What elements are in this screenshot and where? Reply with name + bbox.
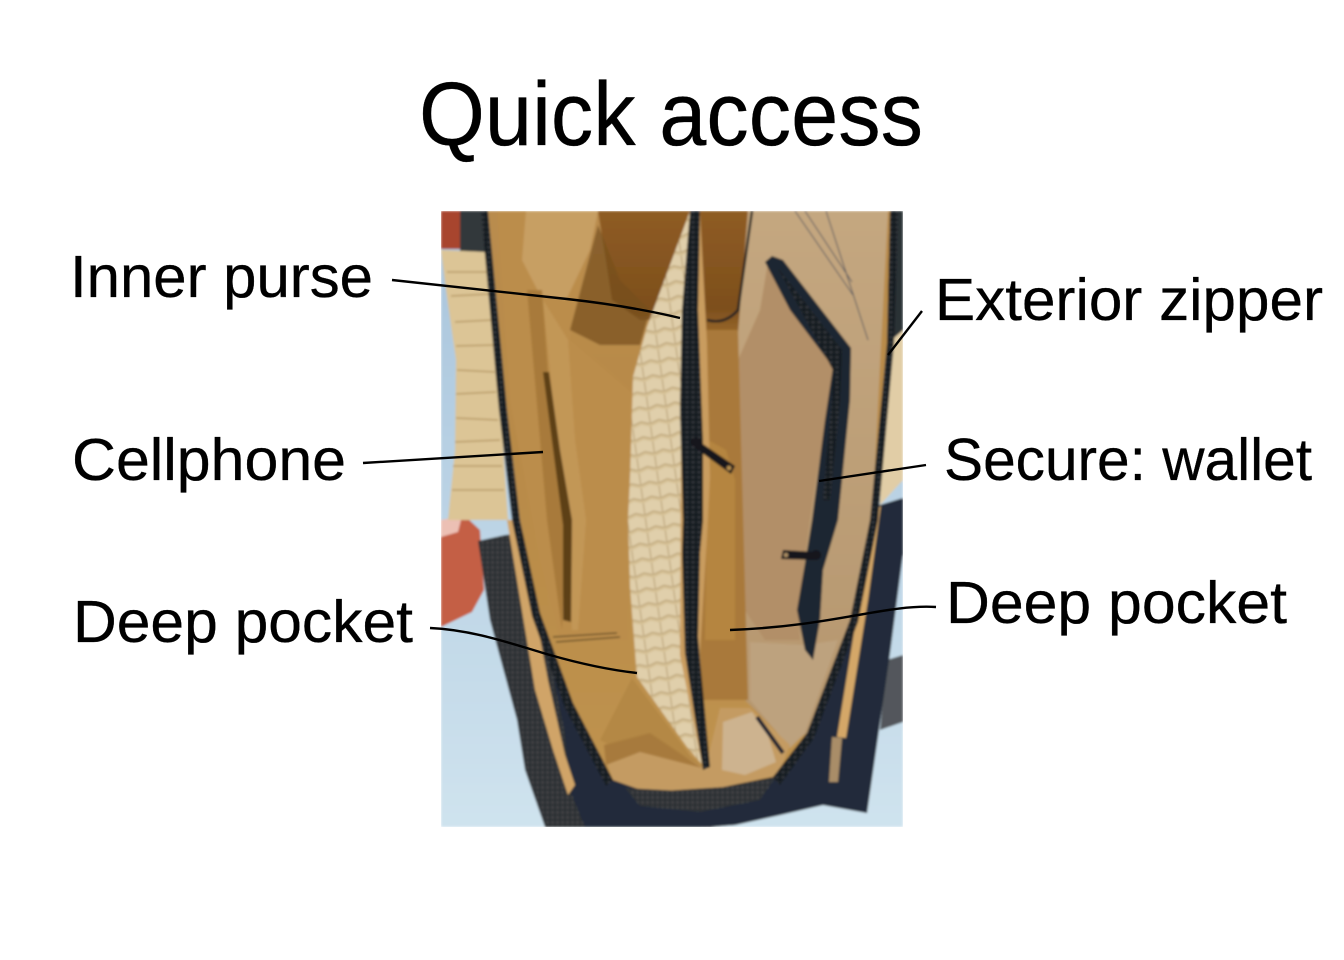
- right pocket panel: [738, 262, 835, 640]
- left main zipper: [481, 211, 613, 786]
- zipper pull, center: [691, 437, 735, 474]
- leader line: cellphone: [363, 452, 543, 463]
- cream handle, right: [880, 330, 903, 505]
- leader line: inner purse: [392, 280, 680, 318]
- center back wall: [598, 211, 748, 331]
- bottom left sleeve: [602, 681, 701, 766]
- dark outer shell: [478, 498, 903, 827]
- inner purse woven panel: [628, 211, 707, 770]
- leader line: secure wallet: [819, 465, 926, 481]
- leader line: right deep pocket: [730, 607, 936, 630]
- leader line: left deep pocket: [430, 628, 637, 673]
- left wall highlight: [522, 211, 598, 300]
- label: cellphone: Cellphone: [72, 427, 346, 493]
- wallet zipper, right: [765, 256, 851, 660]
- label: inner purse: Inner purse: [70, 244, 373, 310]
- cream woven handle, left: [441, 250, 508, 520]
- label: secure wallet: Secure: wallet: [944, 427, 1312, 493]
- inner purse zipper: [680, 211, 710, 770]
- zipper pull, right: [781, 550, 821, 560]
- inner purse tan edging: [680, 211, 710, 770]
- taupe piece below right trim: [829, 737, 842, 782]
- right wall stitching: [795, 211, 868, 340]
- left wall upper section: [497, 211, 640, 640]
- wallet zipper teeth: [783, 276, 842, 500]
- right wall: [737, 211, 888, 745]
- infographic canvas: [74, 79, 1322, 827]
- photo background: floor: [441, 211, 903, 827]
- back wall curved seam: [707, 211, 752, 321]
- floor of bag: [606, 700, 790, 792]
- photo: open bag interior: [441, 211, 903, 827]
- label: exterior zipper: Exterior zipper: [935, 267, 1323, 333]
- dark floor band: [628, 781, 772, 811]
- label: right deep pocket: Deep pocket: [946, 570, 1287, 636]
- interior lining: [488, 211, 890, 792]
- right wall lower: [750, 640, 838, 748]
- cellphone pocket: [527, 290, 620, 642]
- center column lower back: [706, 330, 749, 701]
- right main zipper: [773, 211, 898, 785]
- floor highlight: [722, 712, 776, 775]
- leader line: exterior zipper: [888, 311, 922, 355]
- navy front flap: [548, 498, 903, 827]
- label: left deep pocket: Deep pocket: [73, 589, 413, 655]
- dark shadow on back left: [570, 225, 650, 345]
- dark seam at floor: [757, 717, 783, 753]
- left tan trim strip: [507, 520, 575, 795]
- title: Quick access: [419, 65, 923, 165]
- pale center highlight: [705, 440, 735, 640]
- right tan trim strip: [837, 505, 881, 738]
